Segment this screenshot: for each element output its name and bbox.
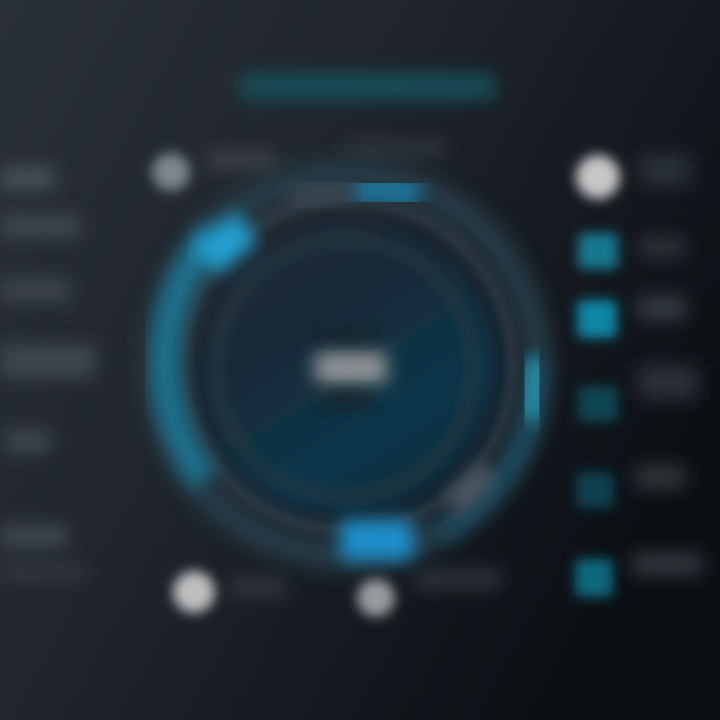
legend text 1	[640, 155, 690, 185]
top left node	[152, 152, 276, 191]
icon: dark teal square	[578, 386, 618, 422]
second inner ring	[217, 240, 473, 496]
top grey segment	[290, 190, 350, 200]
icon: teal square	[578, 233, 618, 269]
inner disc	[195, 216, 499, 520]
bottom centre node	[357, 570, 500, 617]
icon: bottom centre dot	[357, 579, 395, 617]
legend text 4	[638, 365, 698, 400]
lower right arc	[440, 360, 538, 535]
bottom left node	[173, 571, 285, 613]
lower right grey segment	[452, 470, 488, 505]
upper left bright segment	[205, 228, 248, 262]
left blue arc	[165, 232, 215, 480]
ring line	[182, 200, 512, 530]
subtitle above the ring	[345, 142, 445, 156]
bottom centre label	[415, 570, 500, 588]
top left label	[208, 152, 276, 168]
title	[240, 74, 495, 99]
icon: top left dot	[152, 153, 190, 191]
left text column	[0, 168, 95, 579]
outer ring glow	[157, 175, 537, 555]
right legend	[575, 155, 702, 597]
icon: bright teal square	[575, 559, 613, 597]
center label	[315, 328, 387, 406]
icon: bottom left dot	[173, 571, 215, 613]
top segment	[352, 189, 420, 196]
icon: white dot	[576, 155, 620, 199]
legend text 6	[632, 553, 702, 575]
right segment	[528, 358, 536, 420]
circular chart	[157, 175, 538, 560]
icon: deep teal square	[576, 472, 614, 508]
icon: blue square	[577, 300, 617, 338]
legend text 5	[635, 465, 685, 489]
legend text 2	[640, 238, 685, 256]
bottom left label	[230, 578, 285, 596]
legend text 3	[638, 296, 686, 320]
bottom segment	[340, 520, 414, 560]
